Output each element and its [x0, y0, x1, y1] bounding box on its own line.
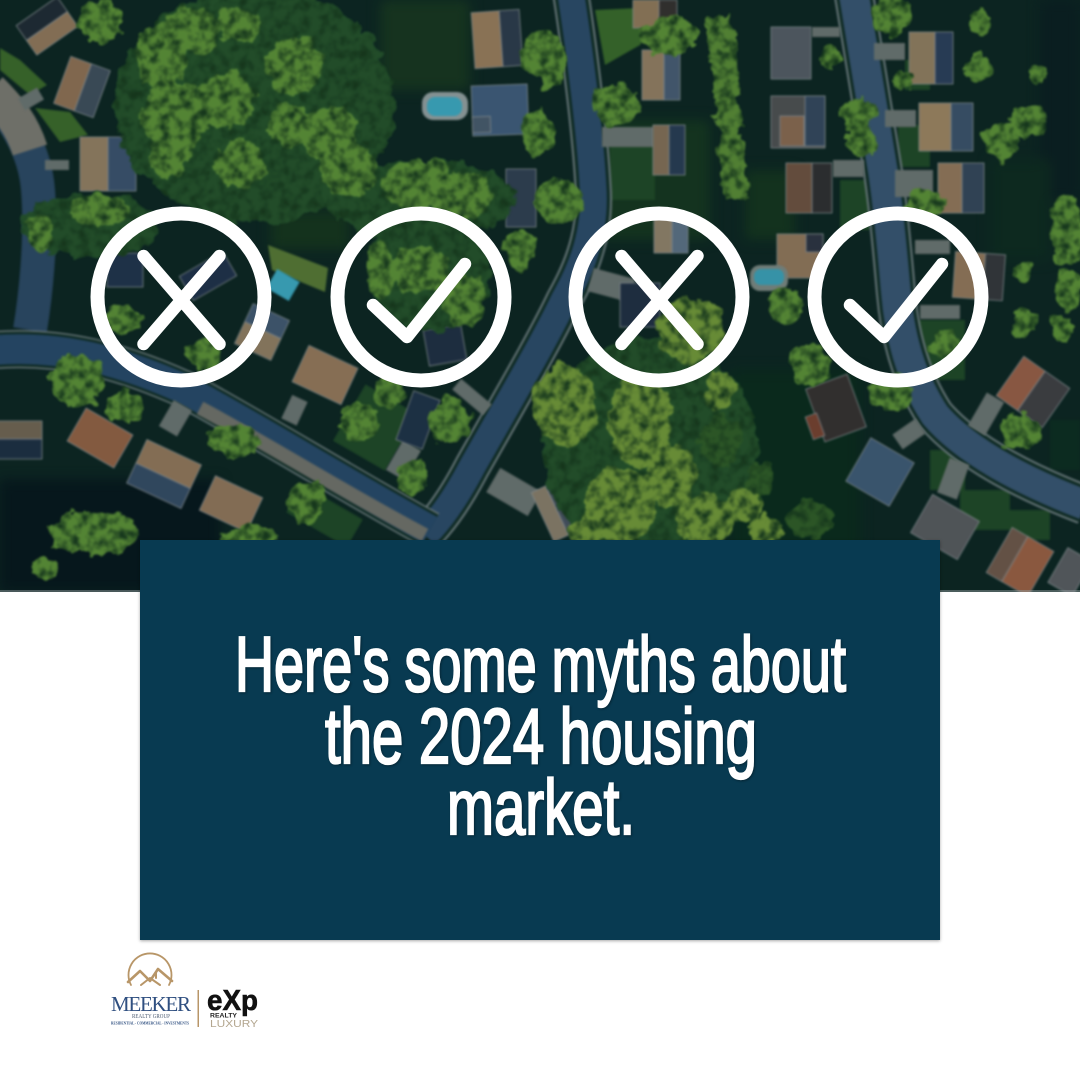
title	[235, 620, 848, 851]
panel: headline card	[140, 540, 940, 940]
icon: check in circle	[338, 214, 504, 380]
text: eXp Realty Luxury: eXp	[207, 985, 258, 1017]
icon: cross in circle	[576, 214, 742, 380]
logo: Meeker Realty Group and eXp Realty Luxury	[111, 952, 258, 1030]
text: Meeker Realty Group: MEEKER	[111, 992, 191, 1016]
trees	[22, 0, 1080, 578]
lawns	[0, 8, 1080, 547]
text: eXp Realty Luxury	[207, 985, 258, 1030]
houses	[0, 0, 1080, 597]
text: Meeker Realty Group: REALTY GROUP	[132, 1014, 171, 1020]
icons: myth and fact circles	[90, 206, 988, 388]
swimming pools	[266, 92, 788, 301]
aerial photo of suburban neighbourhood	[0, 0, 1080, 592]
tree hedge	[708, 14, 748, 200]
text: Meeker Realty Group: RESIDENTIAL · COMMERCIAL · INVESTMENTS	[111, 1020, 189, 1026]
text: eXp Realty Luxury: LUXURY	[210, 1019, 258, 1030]
text: eXp Realty Luxury: REALTY	[210, 1012, 238, 1020]
icon: house in gold circle	[128, 953, 172, 985]
photo bottom edge	[0, 590, 1080, 592]
roads	[0, 0, 1080, 535]
icon: cross in circle	[98, 214, 264, 380]
divider	[198, 990, 199, 1027]
dark photo overlay	[0, 0, 1080, 592]
driveways	[18, 27, 1004, 516]
icon: check in circle	[814, 214, 982, 380]
title: market.	[447, 763, 635, 851]
title: the 2024 housing	[325, 692, 757, 780]
